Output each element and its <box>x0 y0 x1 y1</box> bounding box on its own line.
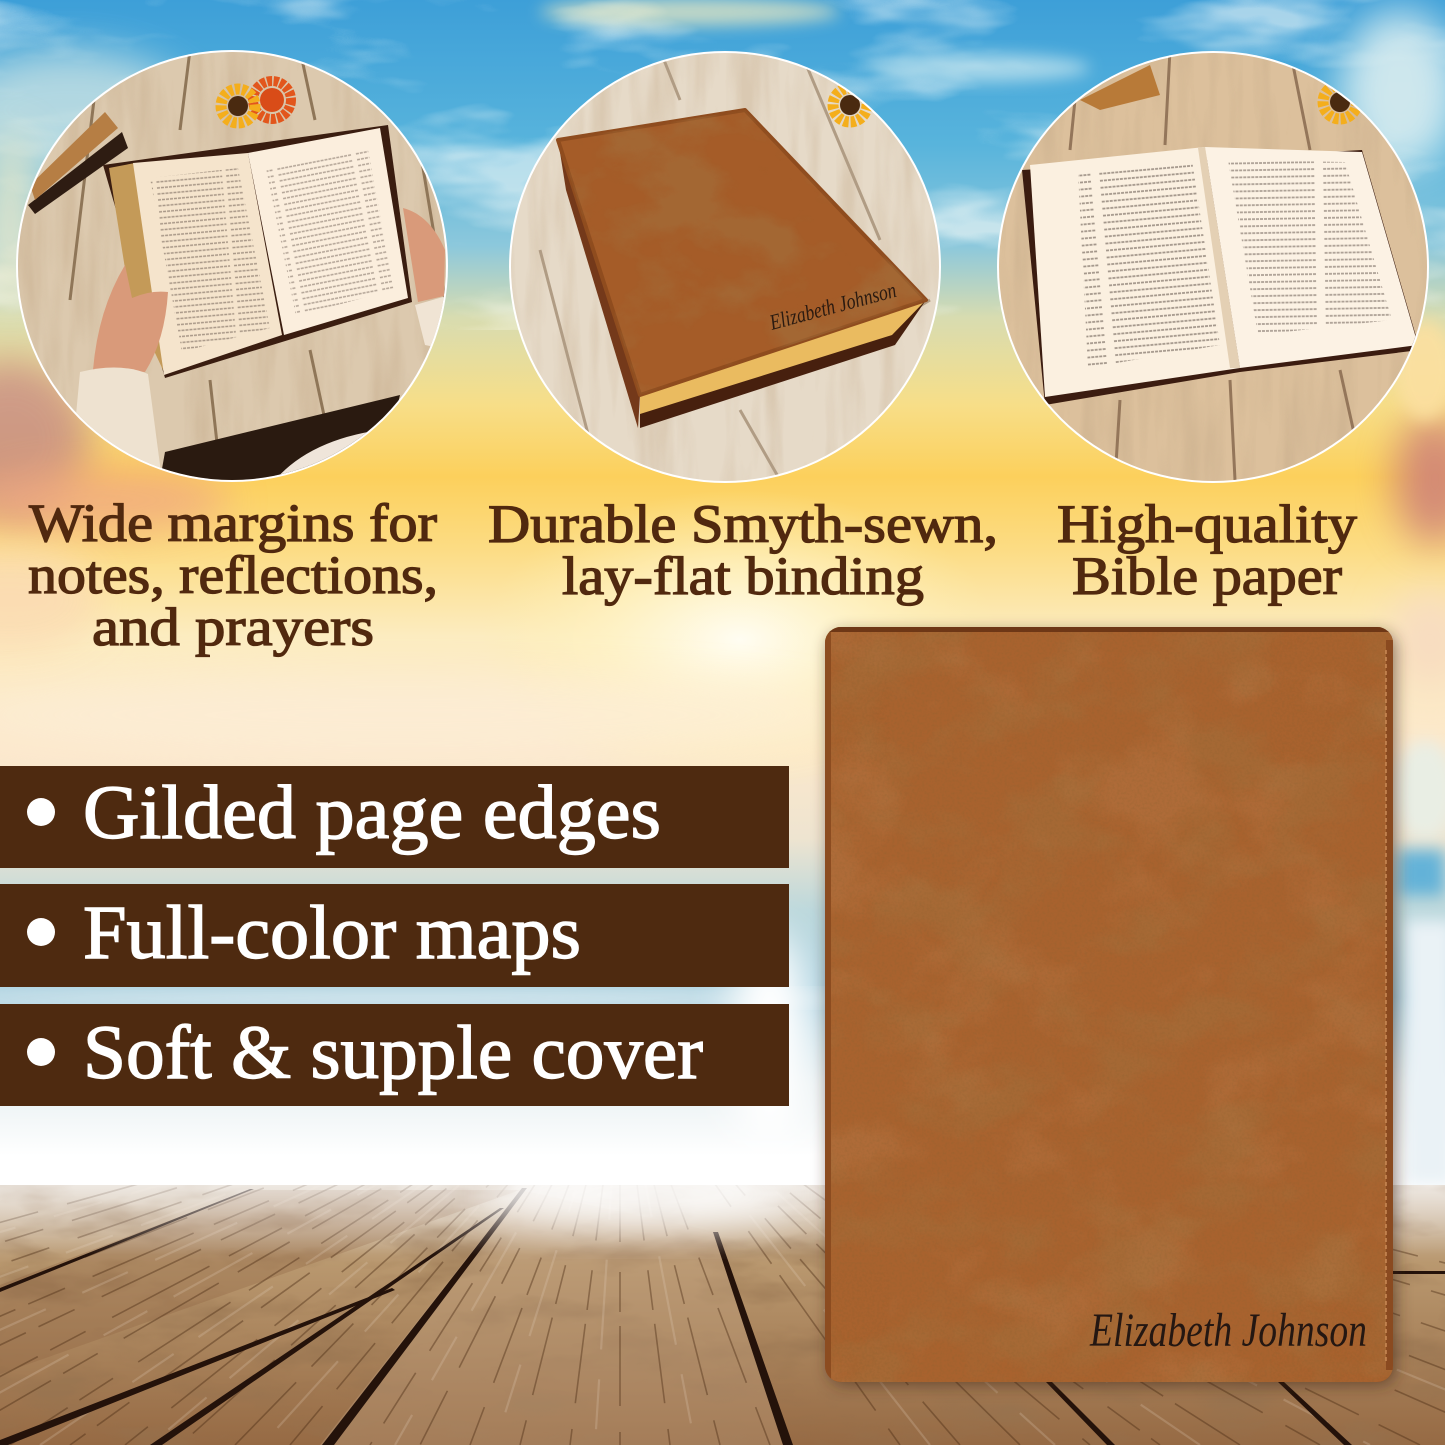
feature bar: gilded page edges <box>0 766 789 868</box>
wooden table <box>0 1185 1445 1445</box>
caption: wide margins: notes, reflections, <box>28 545 438 605</box>
caption: wide margins <box>28 493 438 657</box>
feature bar: gilded page edges: Gilded page edges <box>83 771 661 855</box>
photo: open bible with wide margins <box>10 45 460 485</box>
caption: wide margins: Wide margins for <box>29 493 437 553</box>
caption: wide margins: and prayers <box>92 597 374 657</box>
photo: open bible showing paper <box>995 45 1435 485</box>
photo: leather cover and binding <box>505 45 945 485</box>
caption: binding: lay-flat binding <box>562 546 924 606</box>
caption: paper: High-quality <box>1057 494 1357 554</box>
feature bar: soft and supple cover: Soft & supple cover <box>83 1011 703 1095</box>
caption: binding <box>488 494 998 606</box>
feature bar: soft and supple cover <box>0 1004 789 1106</box>
caption: binding: Durable Smyth-sewn, <box>488 494 998 554</box>
engraved name on small book: Elizabeth Johnson <box>766 277 899 335</box>
caption: paper <box>1057 494 1357 606</box>
leather bible front cover <box>825 627 1396 1385</box>
feature bar: full-color maps: Full-color maps <box>83 891 581 975</box>
caption: paper: Bible paper <box>1072 546 1342 606</box>
feature bar: full-color maps <box>0 884 789 987</box>
engraved name: Elizabeth Johnson <box>1089 1304 1367 1357</box>
